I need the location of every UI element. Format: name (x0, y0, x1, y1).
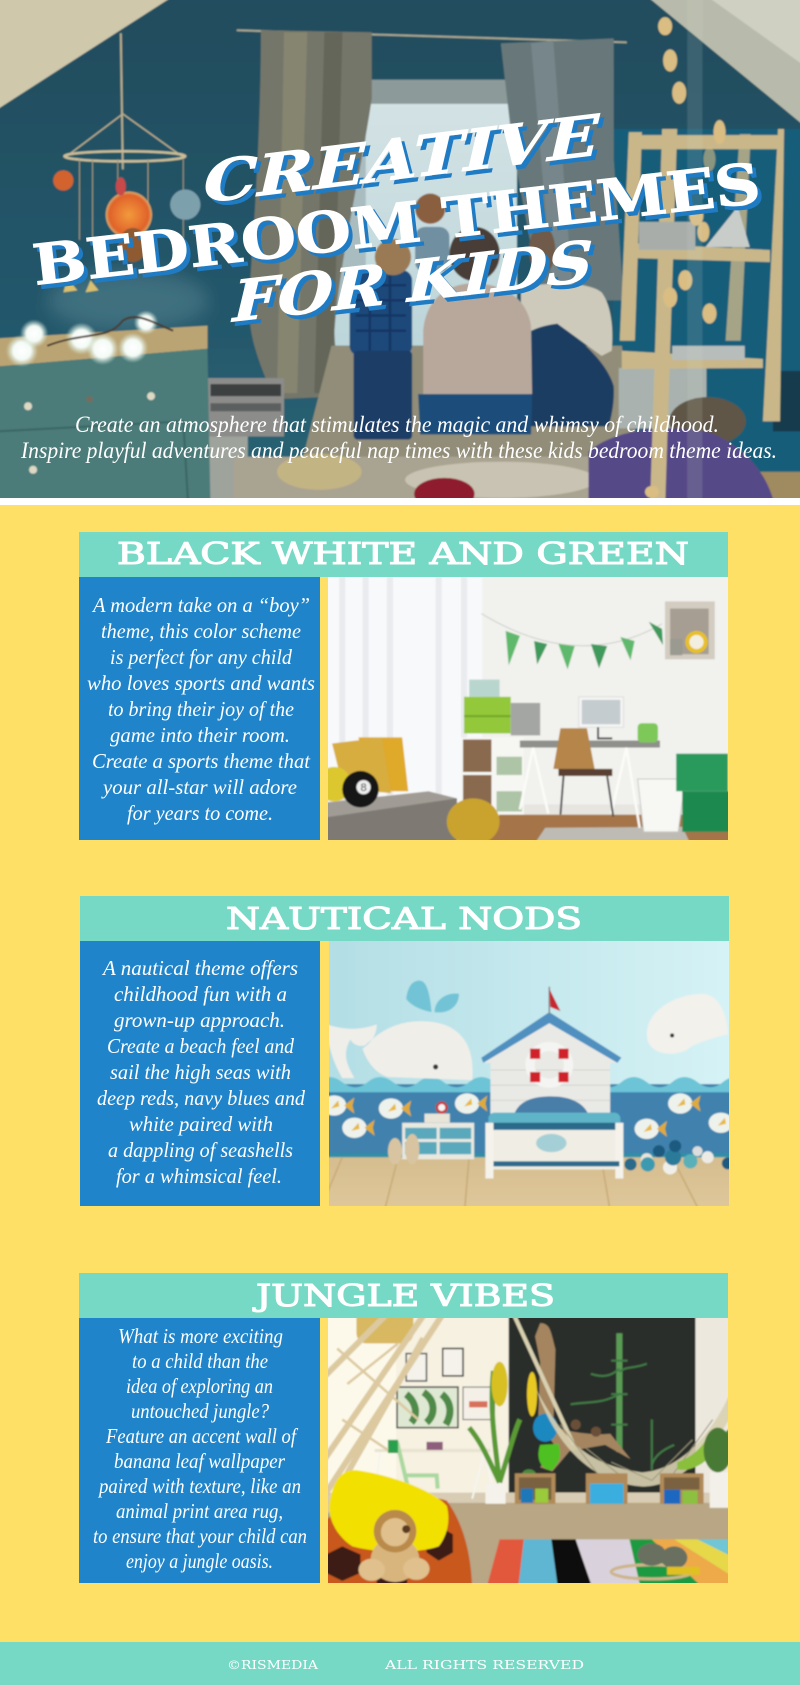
text box (79, 1318, 320, 1583)
body text: idea of exploring an (126, 1374, 273, 1398)
body text: a dappling of seashells (108, 1138, 293, 1162)
body text: What is more exciting (118, 1324, 283, 1348)
body text: Create a beach feel and (107, 1034, 294, 1058)
body text: for years to come. (127, 801, 273, 825)
body text: untouched jungle? (131, 1399, 269, 1423)
body text: Feature an accent wall of (105, 1424, 299, 1448)
hero photo: family in attic bedroom (0, 0, 800, 510)
text box (80, 941, 320, 1206)
body text: banana leaf wallpaper (114, 1449, 286, 1473)
photo: sports bedroom (328, 577, 728, 840)
white divider (0, 498, 800, 505)
body text: paired with texture, like an (97, 1474, 301, 1498)
footer bar (0, 1642, 800, 1685)
body text: sail the high seas with (110, 1060, 291, 1084)
heading: NAUTICAL NODS (226, 902, 582, 937)
body text: is perfect for any child (110, 645, 292, 669)
photo: nautical bedroom (329, 941, 729, 1206)
heading: JUNGLE VIBES (252, 1279, 555, 1314)
photo: sports bedroom: 8 (360, 782, 367, 794)
hero panel (0, 0, 800, 510)
title: FOR KIDS (225, 227, 601, 336)
body text: for a whimsical feel. (116, 1164, 282, 1188)
body text: to ensure that your child can (93, 1524, 307, 1548)
body text: to a child than the (132, 1349, 268, 1373)
body text: Create a sports theme that (92, 749, 311, 773)
heading bar (80, 896, 729, 941)
body text: animal print area rug, (116, 1499, 283, 1523)
body text: enjoy a jungle oasis. (126, 1549, 273, 1573)
footer text: ALL RIGHTS RESERVED (384, 1657, 584, 1672)
body text: theme, this color scheme (101, 619, 301, 643)
panel: jungle vibes (79, 1273, 738, 1594)
footer text: ©RISMEDIA (227, 1657, 319, 1672)
heading: BLACK WHITE AND GREEN (117, 537, 689, 572)
body text: who loves sports and wants (87, 671, 315, 695)
body text: to bring their joy of the (108, 697, 294, 721)
body text (93, 1324, 307, 1573)
hero intro text: Create an atmosphere that stimulates the magic and whimsy of childhood. (75, 412, 719, 437)
body text: A nautical theme offers (101, 956, 298, 980)
body text (87, 593, 315, 825)
heading bar (79, 1273, 728, 1318)
heading bar (79, 532, 728, 577)
body text: childhood fun with a (114, 982, 287, 1006)
panel: black white and green (79, 532, 738, 852)
title: CREATIVE (196, 101, 607, 217)
hero intro text (20, 412, 777, 463)
body text: A modern take on a “boy” (91, 593, 310, 617)
title (29, 101, 764, 336)
body text: game into their room. (110, 723, 290, 747)
body text: your all-star will adore (101, 775, 297, 799)
title: BEDROOM THEMES (29, 150, 764, 299)
body text: deep reds, navy blues and (97, 1086, 305, 1110)
body text (97, 956, 305, 1188)
panel: nautical nods (80, 896, 748, 1218)
body text: white paired with (129, 1112, 273, 1136)
text box (79, 577, 320, 840)
footer text (227, 1657, 584, 1672)
photo: jungle bedroom (328, 1318, 728, 1583)
body text: grown-up approach. (114, 1008, 285, 1032)
